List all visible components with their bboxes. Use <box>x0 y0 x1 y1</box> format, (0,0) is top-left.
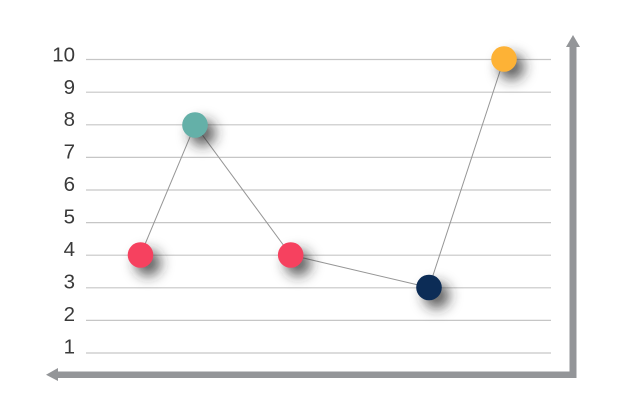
point: value 4, red <box>128 242 153 268</box>
point: value 10, yellow <box>491 46 517 72</box>
y-axis labels: 3 <box>64 270 75 294</box>
point: value 4, red <box>278 242 304 268</box>
y-axis labels: 6 <box>64 173 75 196</box>
y-axis labels: 9 <box>64 76 75 99</box>
y-axis labels: 10 <box>52 44 75 66</box>
y-axis labels: 2 <box>64 303 75 326</box>
point shadows <box>135 54 524 308</box>
point: value 3, navy <box>416 275 442 300</box>
y-axis labels: 8 <box>64 108 75 131</box>
y-axis labels: 5 <box>64 206 75 228</box>
y-axis labels: 4 <box>64 238 75 261</box>
y-axis labels: 7 <box>64 140 75 164</box>
point: value 8, teal <box>182 112 208 138</box>
data line <box>140 59 504 288</box>
y-axis labels <box>52 44 75 358</box>
axis arrows <box>46 35 580 381</box>
y-axis labels: 1 <box>64 336 75 358</box>
